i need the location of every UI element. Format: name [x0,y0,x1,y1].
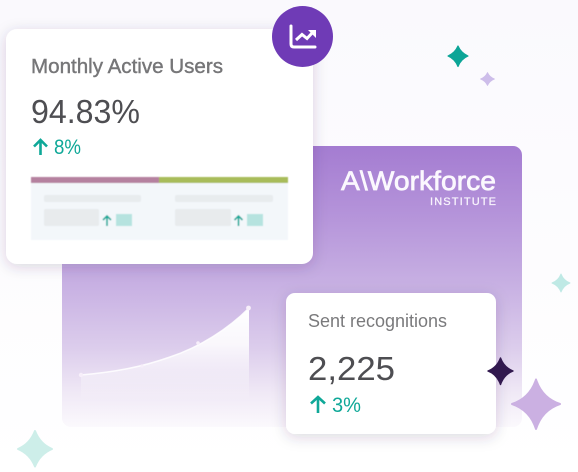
mini table [31,177,288,240]
change: 3%: 3% [332,394,361,417]
panel: Sent recognitions card [286,293,496,434]
icon: pale teal sparkle bottom left [18,431,52,466]
icon: pale teal sparkle right [552,274,570,292]
panel: Monthly Active Users card [6,29,313,264]
icon: teal sparkle [448,46,468,66]
area chart: growth curve [79,306,251,402]
heading: Sent recognitions: Sent recognitions [308,311,447,331]
icon: small lavender sparkle [480,72,494,86]
logo: Workforce Institute: INSTITUTE [430,196,496,208]
logo: Workforce Institute: A\Workforce [341,166,496,196]
panel: purple gradient background [62,146,522,427]
logo: Workforce Institute [341,166,496,208]
icon: purple chart badge [272,6,333,67]
metric: 94.83%: 94.83% [31,93,140,130]
icon: large lavender sparkle [512,380,560,429]
icon: up arrow [34,140,47,155]
icon: dark sparkle [488,358,513,384]
change: 8%: 8% [54,136,81,159]
metric: 2,225: 2,225 [308,350,395,387]
heading: Monthly Active Users: Monthly Active Users [31,56,223,78]
icon: up arrow [311,397,325,413]
